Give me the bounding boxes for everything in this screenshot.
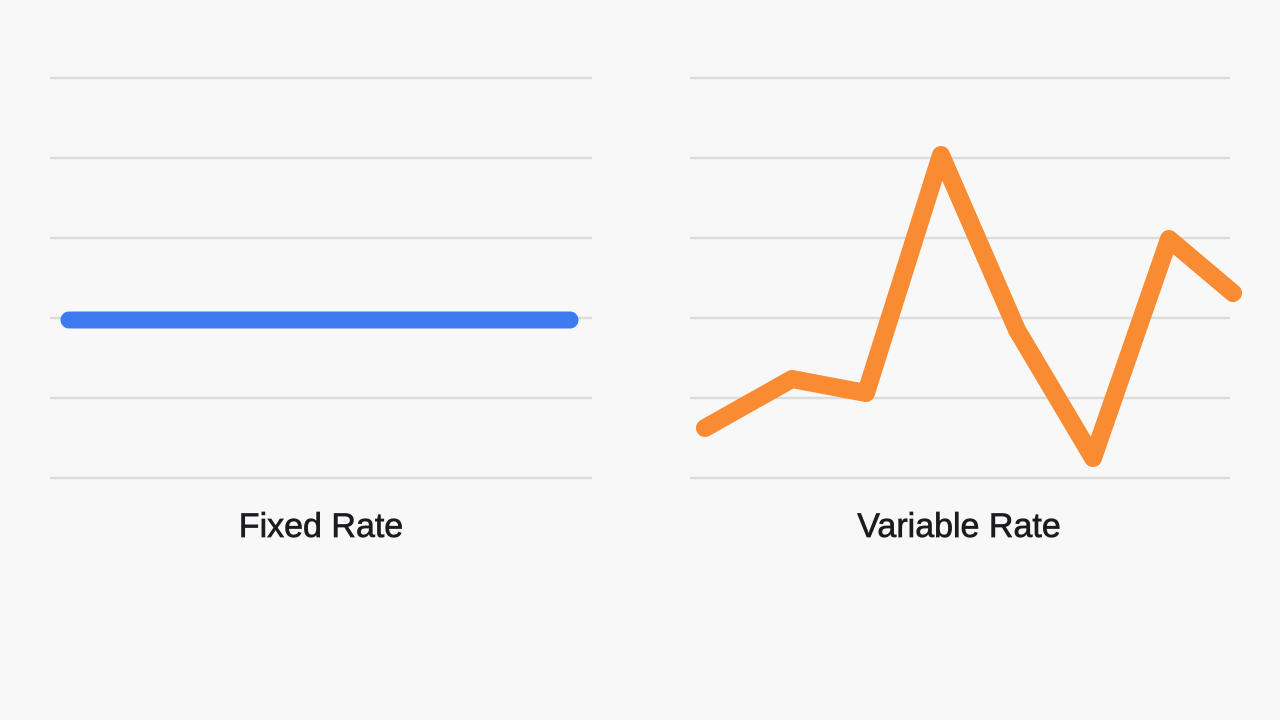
label: Fixed Rate: Fixed Rate (239, 507, 403, 545)
line: variable rate (705, 155, 1233, 458)
label: Variable Rate: Variable Rate (857, 507, 1061, 545)
panel: fixed rate chart (50, 78, 592, 478)
line: fixed rate (69, 312, 570, 328)
panel: variable rate chart (690, 78, 1233, 478)
